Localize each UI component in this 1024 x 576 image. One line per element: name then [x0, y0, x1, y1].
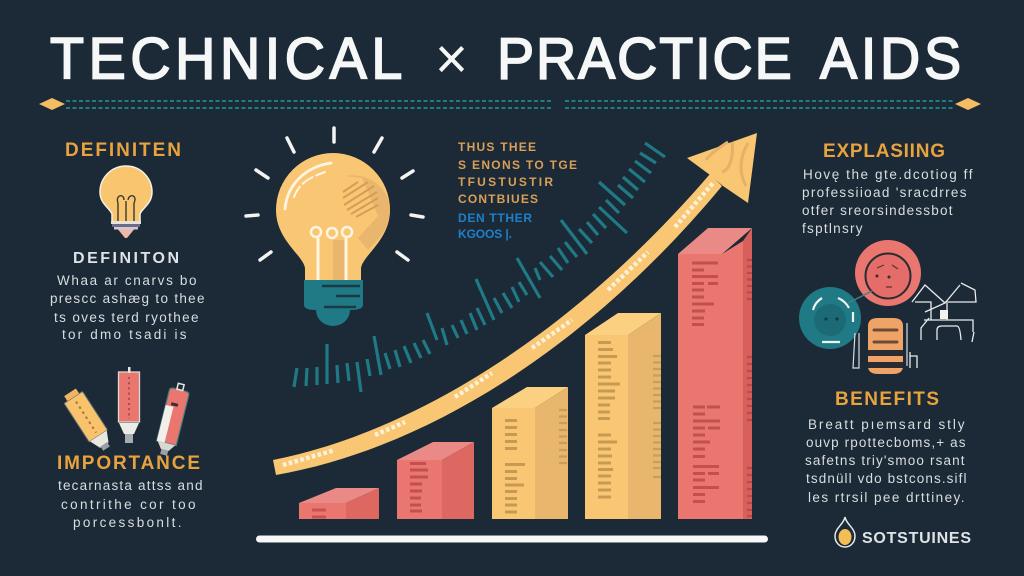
text block: benefits body: Breatt pıemsard stly: [808, 417, 965, 432]
text block: benefits body: les rtrsil pee drttiney.: [808, 490, 965, 505]
text block: explaining body: Hovę the gte.dcotiog ff: [803, 167, 973, 182]
heading: explasiing: EXPLASIING: [823, 141, 945, 162]
title: TECHNICAL: [50, 27, 402, 92]
text block: centre note: KGOOS |.: [458, 227, 512, 241]
title divider: [39, 98, 981, 110]
text block: importance body: [58, 478, 203, 530]
text block: importance body: porcessbonlt.: [73, 515, 182, 530]
panel: importance: [57, 367, 203, 530]
text block: centre note: TFUSTUSTIR: [458, 175, 553, 189]
chart: bars: [299, 228, 752, 519]
bulb glass: [276, 153, 390, 280]
text block: definition body: [50, 273, 205, 342]
rays: [246, 128, 423, 260]
bar 4: [585, 313, 661, 519]
text block: benefits body: [805, 417, 967, 505]
text block: centre note: THUS THEE: [458, 140, 536, 154]
arrow: growth trend: [273, 133, 757, 475]
text block: benefits body: tsdnüll vdo bstcons.sifl: [806, 471, 967, 486]
panel: benefits: [805, 389, 971, 547]
text block: centre note: CONTBIUES: [458, 192, 538, 206]
text block: explaining body: professiioad 'sracdrres: [802, 185, 967, 200]
title: AIDS: [820, 27, 961, 92]
title: ×: [435, 26, 468, 92]
icon: teal face: [799, 287, 872, 349]
bar 2: [397, 442, 474, 519]
bar 5: [678, 228, 752, 519]
icon: small light bulb: [100, 166, 152, 238]
text block: explaining body: fsptlnsry: [802, 221, 863, 236]
text block: centre note: S ENONS TO TGE: [458, 158, 577, 172]
title: [50, 26, 961, 92]
subheading: definiton: DEFINITON: [73, 250, 179, 267]
bar 1: [299, 488, 379, 519]
icon: yellow pen: [61, 386, 116, 455]
icon: coral face: [855, 240, 921, 306]
text block: centre note: [458, 140, 577, 241]
icon: line-art device: [910, 283, 976, 368]
icon: coral and white tube: [154, 382, 191, 457]
text block: definition body: prescc ashæg to thee: [50, 291, 205, 306]
text block: importance body: contrithe cor too: [61, 497, 196, 512]
title: PRACTICE: [497, 27, 792, 92]
text block: benefits body: safetns triy'smoo rsant: [805, 453, 965, 468]
heading: definiten: DEFINITEN: [65, 140, 181, 161]
bar 3: [492, 387, 568, 519]
heading: importance: IMPORTANCE: [57, 453, 200, 474]
chart baseline: [256, 536, 768, 542]
chart: teal trend ticks: [294, 143, 665, 392]
logo: sotstuines: SOTSTUINES: [862, 530, 971, 547]
panel: definition: [50, 140, 205, 342]
text block: explaining body: [802, 167, 973, 236]
text block: explaining body: otfer sreorsindessbot: [802, 203, 953, 218]
icon: coral syringe: [118, 367, 140, 443]
text block: definition body: ts oves terd ryothee: [54, 310, 199, 325]
text block: importance body: tecarnasta attss and: [58, 478, 203, 493]
text block: definition body: tor dmo tsadi is: [62, 327, 187, 342]
text block: benefits body: ouvp rpottecboms,+ as: [806, 435, 966, 450]
heading: benefits: BENEFITS: [835, 389, 939, 410]
text block: centre note: DEN TTHER: [458, 211, 532, 225]
text block: definition body: Whaa ar cnarvs bo: [57, 273, 197, 288]
logo: sotstuines: [835, 517, 971, 547]
icon: orange capsule: [853, 318, 907, 374]
panel: explaining: [799, 141, 976, 374]
bulb base: [304, 280, 363, 310]
icon: large light bulb: [246, 128, 423, 326]
